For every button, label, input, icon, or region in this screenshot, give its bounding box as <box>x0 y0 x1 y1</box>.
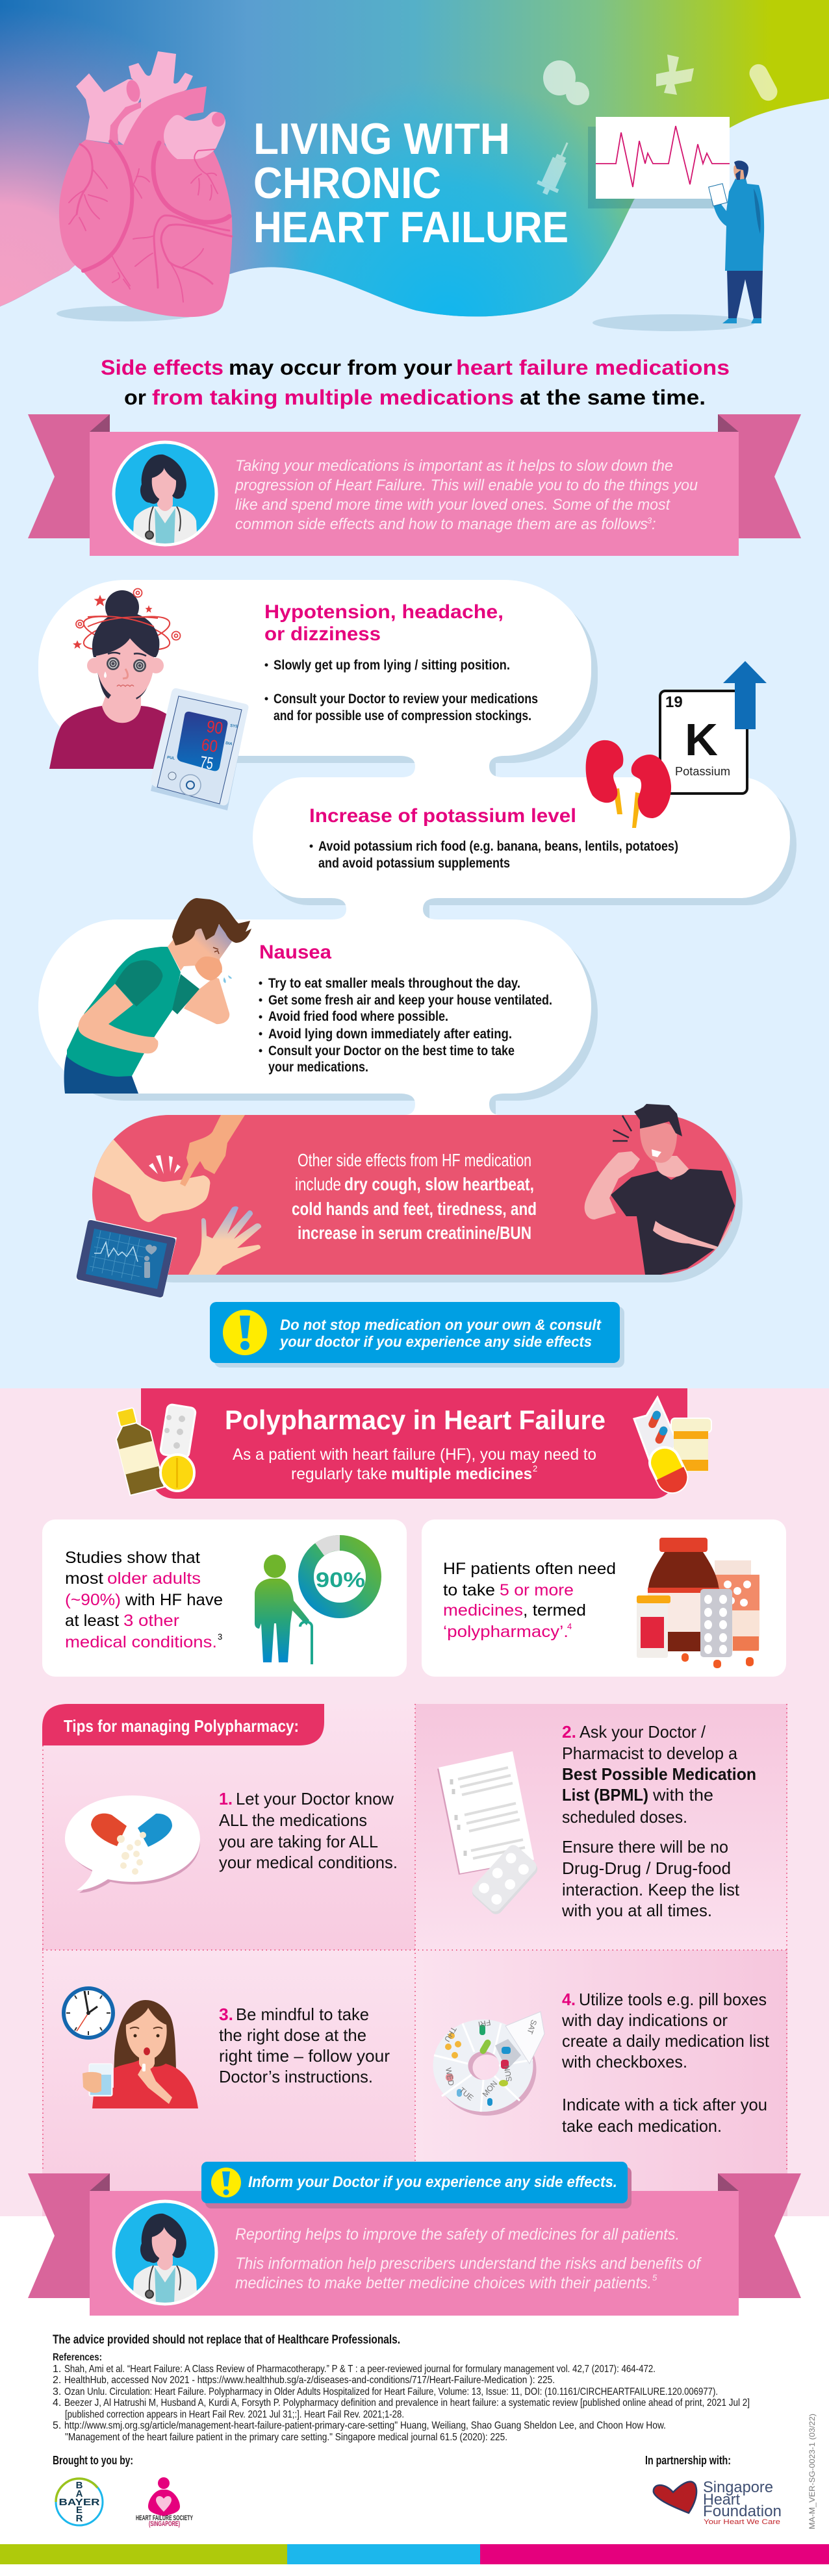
icon: periodic tile: Potassium <box>675 765 730 778</box>
card text: Studies show that <box>65 1549 200 1567</box>
icon: cold hand <box>188 1207 261 1275</box>
monitor with ECG trace <box>588 117 730 208</box>
icon: weekly pill organiser: WED <box>444 2067 456 2086</box>
panel: reporting ribbon <box>28 2173 801 2316</box>
tip 1 text: Let your Doctor know <box>236 1789 394 1808</box>
intro text: like and spend more time with your loved ones. Some of the most <box>235 496 670 514</box>
advice bullets: Consult your Doctor to review your medications <box>274 692 538 707</box>
illustrations: foot and hands <box>84 1115 245 1222</box>
references: http://www.smj.org.sg/article/management-heart-failure-patient-primary-care-setting" Huang, Weiliang, Shao Guang Sheldon Lee, and Choon How How. <box>64 2420 666 2431</box>
panel: potassium <box>253 661 790 919</box>
icon: weekly pill organiser: TUE <box>457 2086 475 2103</box>
logo: Singapore Heart Foundation <box>654 2479 782 2526</box>
advice bullets <box>265 658 538 723</box>
tip 2 text: with you at all times. <box>561 1901 712 1920</box>
card: five or more medicines <box>422 1519 786 1677</box>
intro text: common side effects and how to manage them are as follows <box>235 516 648 533</box>
subtitle: As a patient with heart failure (HF), you may need to <box>233 1445 596 1464</box>
references: 1. <box>53 2364 61 2375</box>
icon: elderly person <box>255 1555 312 1664</box>
logo: Heart Failure Society: (SINGAPORE) <box>149 2520 180 2528</box>
reporting text: 5 <box>652 2273 657 2282</box>
tips label: Tips for managing Polypharmacy: <box>64 1716 299 1736</box>
card text: to take <box>443 1581 495 1599</box>
card text: 5 or more <box>500 1581 574 1599</box>
main heading: Side effects <box>101 356 223 379</box>
card text: 3 other <box>123 1612 179 1630</box>
icon: exclamation <box>223 1310 267 1355</box>
page background <box>0 0 829 1388</box>
panel: intro ribbon <box>28 414 801 556</box>
references: [published correction appears in Heart Fail Rev. 2021 Jul 31;:]. Heart Fail Rev. 2021;1-28. <box>65 2409 404 2420</box>
logo: Heart Failure Society: HEART FAILURE SOCIETY <box>136 2514 193 2522</box>
tips label <box>42 1704 324 1745</box>
card text <box>65 1549 223 1651</box>
icon: exclamation <box>211 2168 241 2197</box>
tip 3 text: 3. <box>219 2005 233 2024</box>
card: older adults statistic <box>42 1519 407 1677</box>
advice bullets: Try to eat smaller meals throughout the day. <box>268 976 520 991</box>
icon: blood pressure monitor: 60 <box>200 734 219 756</box>
icon: coughing man <box>585 1104 736 1275</box>
tip 1 text <box>219 1789 398 1872</box>
icon: medicine bottles <box>637 1538 759 1668</box>
logo: Singapore Heart Foundation: Heart <box>703 2491 740 2508</box>
pink section background <box>0 1388 829 2216</box>
subtitle: multiple medicines <box>391 1465 532 1483</box>
icon: blood pressure monitor: 90 <box>205 716 224 738</box>
card text: most <box>65 1569 103 1588</box>
card text: HF patients often need <box>443 1560 616 1578</box>
icon: right medicines <box>634 1397 711 1497</box>
references: Shah, Ami et al. “Heart Failure: A Class Review of Pharmacotherapy.” P & T : a peer-reviewed journal for formulary management vol. 42,7 (2017): 464-472. <box>64 2364 656 2375</box>
heading: Nausea <box>259 942 331 963</box>
heading <box>264 601 504 645</box>
subtitle <box>233 1445 596 1483</box>
heading: or dizziness <box>264 623 381 645</box>
intro text: progression of Heart Failure. This will enable you to do the things you <box>235 477 698 494</box>
logo: Heart Failure Society <box>136 2477 193 2528</box>
icon: heart <box>59 51 232 317</box>
text block: Other side effects from HF medication <box>298 1150 531 1170</box>
panel shadows <box>45 587 797 1282</box>
logo: Bayer: A <box>76 2488 83 2499</box>
advice bullets: and avoid potassium supplements <box>318 856 510 871</box>
logo: Bayer: R <box>76 2513 83 2524</box>
text block: cold hands and feet, tiredness, and <box>292 1199 537 1219</box>
header banner <box>0 0 829 338</box>
partnership label: In partnership with: <box>645 2454 731 2467</box>
icon: blood pressure monitor: 75 <box>199 752 214 773</box>
logo: Bayer: BAYER <box>58 2497 100 2508</box>
intro text: Taking your medications is important as it helps to slow down the <box>235 457 673 475</box>
icon: weekly pill organiser <box>433 2012 544 2116</box>
icon: up arrow <box>723 661 767 729</box>
tip 3 text: Doctor’s instructions. <box>219 2067 373 2086</box>
footer colour strip <box>0 2544 829 2564</box>
header gradient blob <box>0 0 829 338</box>
connector <box>400 1094 505 1115</box>
card text: medicines <box>443 1601 523 1619</box>
tip 4 text: with day indications or <box>561 2010 728 2030</box>
card text: , termed <box>523 1601 586 1619</box>
references <box>53 2352 750 2443</box>
tip 4 text <box>561 1990 770 2136</box>
advice bullets: Slowly get up from lying / sitting position. <box>274 658 510 673</box>
icon: periodic tile: K <box>685 714 718 765</box>
text block: include <box>295 1174 341 1194</box>
card text: at least <box>65 1612 119 1630</box>
tip 1 text: you are taking for ALL <box>219 1832 378 1851</box>
title: HEART FAILURE <box>253 203 568 252</box>
panel: tips grid <box>42 1704 787 2216</box>
icon: capsule <box>746 61 780 104</box>
panel: hypotension <box>38 580 591 810</box>
subtitle: 2 <box>533 1464 537 1473</box>
tip 4 text: with checkboxes. <box>561 2052 687 2071</box>
icon: woman taking pill <box>83 2000 198 2108</box>
main heading: or <box>124 386 146 409</box>
title <box>253 114 568 252</box>
doctor portrait <box>114 442 216 545</box>
tip 2 text: Ensure there will be no <box>562 1837 728 1857</box>
donut chart 90% <box>306 1543 374 1610</box>
icon: blood pressure monitor: DIA <box>225 742 233 747</box>
icon: blood pressure monitor <box>151 688 248 810</box>
references: 2. <box>53 2375 61 2386</box>
panel: polypharmacy banner <box>110 1388 711 1499</box>
card text: older adults <box>107 1569 201 1588</box>
tip 3 text: right time – follow your <box>219 2046 390 2066</box>
icon: nauseous man <box>64 898 251 1094</box>
references: HealthHub, accessed Nov 2021 - https://www.healthhub.sg/a-z/diseases-and-conditions/717/Heart-Failure-Medication ): 225. <box>64 2375 555 2386</box>
icon: tablet <box>76 1219 177 1298</box>
icon: weekly pill organiser: SAT <box>525 2018 539 2036</box>
heading: Increase of potassium level <box>309 805 576 827</box>
main heading: at the same time. <box>520 386 706 409</box>
tip 1 text: 1. <box>219 1789 233 1808</box>
icon: periodic tile <box>660 691 747 794</box>
main heading: may occur from your <box>229 356 452 379</box>
reporting text: medicines to make better medicine choices with their patients. <box>235 2274 652 2292</box>
icon: clock <box>64 1988 113 2038</box>
connector <box>331 898 438 919</box>
references: 4. <box>53 2397 61 2408</box>
advice bullets: Avoid potassium rich food (e.g. banana, beans, lentils, potatoes) <box>318 839 678 854</box>
subtitle: regularly take <box>291 1465 387 1483</box>
references: 5. <box>53 2420 61 2431</box>
references: 3. <box>53 2386 61 2397</box>
tip 2 text: interaction. Keep the list <box>562 1880 740 1899</box>
tip 2 text: Drug-Drug / Drug-food <box>562 1858 731 1878</box>
tip 4 text: 4. <box>562 1990 576 2009</box>
title: CHRONIC <box>253 158 441 208</box>
advice bullets <box>259 976 552 1075</box>
callout: inform your doctor <box>201 2162 631 2208</box>
ground shadow under doctor <box>593 314 755 331</box>
advice bullets: your medications. <box>268 1060 368 1075</box>
text block <box>292 1150 537 1243</box>
panel: nausea <box>38 898 591 1115</box>
white footer background <box>0 2216 829 2576</box>
heart ground shadow <box>57 306 197 321</box>
title: Polypharmacy in Heart Failure <box>225 1405 606 1435</box>
tip 3 text: Be mindful to take <box>236 2005 369 2024</box>
vertical document code: MA-M_VER-SG-0023-1 (03/22) <box>808 2414 817 2529</box>
disclaimer: The advice provided should not replace that of Healthcare Professionals. <box>53 2333 400 2347</box>
tip 1 text: your medical conditions. <box>219 1853 398 1872</box>
icon: weekly pill organiser: THU <box>442 2025 459 2044</box>
title: LIVING WITH <box>253 114 510 164</box>
icon: blood pressure monitor: SYS <box>230 724 238 729</box>
icon: medication list <box>437 1751 541 1917</box>
intro text <box>235 457 698 533</box>
advice bullets: Avoid fried food where possible. <box>268 1009 448 1024</box>
main heading: heart failure medications <box>456 356 730 379</box>
icon: weekly pill organiser: SUN <box>502 2065 514 2082</box>
advice bullets <box>309 839 678 871</box>
callout text <box>279 1316 602 1350</box>
donut chart 90%: 90% <box>316 1568 365 1592</box>
references: "Management of the heart failure patient in the primary care setting." Singapore medical journal 61.5 (2020): 225. <box>65 2432 507 2443</box>
icon: blood pressure monitor: PUL <box>167 756 175 761</box>
advice bullets: and for possible use of compression stockings. <box>274 708 531 723</box>
tip 2 text: with the <box>652 1785 713 1805</box>
card text: (~90%) <box>65 1591 121 1609</box>
tip 2 text <box>561 1722 756 1920</box>
brought to you by label: Brought to you by: <box>53 2454 133 2467</box>
reporting text: Reporting helps to improve the safety of medicines for all patients. <box>235 2225 680 2244</box>
card text: medical conditions. <box>65 1633 217 1651</box>
quadrant backgrounds <box>42 1704 415 1950</box>
tip 4 text: create a daily medication list <box>562 2031 770 2051</box>
tip 2 text: 2. <box>562 1722 576 1742</box>
icon: cross <box>656 55 694 95</box>
icon: dizzy woman <box>49 588 181 769</box>
card text <box>443 1560 616 1641</box>
tip 4 text: Indicate with a tick after you <box>562 2095 767 2114</box>
card text: 4 <box>567 1621 572 1631</box>
reporting text <box>235 2225 702 2292</box>
icon: weekly pill organiser: MON <box>481 2079 499 2099</box>
tip 2 text: Ask your Doctor / <box>580 1722 706 1742</box>
doctor portrait <box>114 2201 216 2305</box>
text block: dry cough, slow heartbeat, <box>344 1174 534 1194</box>
tip 1 text: ALL the medications <box>219 1810 367 1830</box>
icon: periodic tile: 19 <box>665 694 683 711</box>
intro text: 3 <box>647 516 652 525</box>
logo: Bayer: B <box>76 2480 83 2491</box>
card text: 3 <box>218 1632 222 1642</box>
logo: Singapore Heart Foundation: Singapore <box>703 2479 773 2496</box>
ribbon tails <box>28 414 801 538</box>
icon: pain marks <box>149 1155 181 1174</box>
advice bullets: Consult your Doctor on the best time to take <box>268 1044 515 1058</box>
text block: increase in serum creatinine/BUN <box>298 1223 531 1243</box>
tip 3 text <box>219 2005 390 2086</box>
tip 4 text: take each medication. <box>562 2116 722 2136</box>
callout: inform your doctor: Inform your Doctor if you experience any side effects. <box>248 2173 617 2191</box>
advice bullets: Get some fresh air and keep your house ventilated. <box>268 993 552 1008</box>
logo: Singapore Heart Foundation: Your Heart We Care <box>704 2518 780 2526</box>
panel: other side effects <box>76 1104 736 1298</box>
card text: ‘polypharmacy’. <box>443 1623 568 1641</box>
main heading <box>101 356 730 409</box>
icon: kidneys <box>586 740 671 828</box>
icon: left medicines <box>110 1404 196 1495</box>
intro text: : <box>652 516 656 533</box>
tip 2 text: Pharmacist to develop a <box>562 1744 738 1763</box>
callout: do not stop medication <box>210 1302 624 1368</box>
advice bullets: Avoid lying down immediately after eating. <box>268 1027 512 1042</box>
icon: weekly pill organiser: FRI <box>478 2018 491 2029</box>
tip 3 text: the right dose at the <box>219 2025 366 2045</box>
icon: speech bubble with capsule <box>65 1795 200 1893</box>
ribbon tails <box>28 2173 801 2298</box>
connector <box>400 756 505 777</box>
icon: syringe <box>534 138 578 198</box>
main heading: from taking multiple medications <box>152 386 514 409</box>
tip 2 text: List (BPML) <box>562 1785 648 1805</box>
tip 2 text: scheduled doses. <box>562 1807 687 1827</box>
logo: Bayer <box>56 2479 103 2525</box>
tip 4 text: Utilize tools e.g. pill boxes <box>579 1990 767 2009</box>
callout text: your doctor if you experience any side effects <box>279 1333 592 1350</box>
dotted separators <box>42 1704 787 2171</box>
icon: tablets <box>543 60 589 105</box>
card text: with HF have <box>125 1591 223 1609</box>
doctor figure <box>709 160 764 323</box>
logo: Bayer: E <box>76 2505 83 2516</box>
heading: Hypotension, headache, <box>264 601 504 623</box>
references: References: <box>53 2352 102 2363</box>
logo: Singapore Heart Foundation: Foundation <box>703 2503 782 2520</box>
reporting text: This information help prescribers understand the risks and benefits of <box>235 2255 702 2273</box>
tip 2 text: Best Possible Medication <box>562 1764 756 1784</box>
callout text: Do not stop medication on your own & consult <box>280 1316 602 1333</box>
